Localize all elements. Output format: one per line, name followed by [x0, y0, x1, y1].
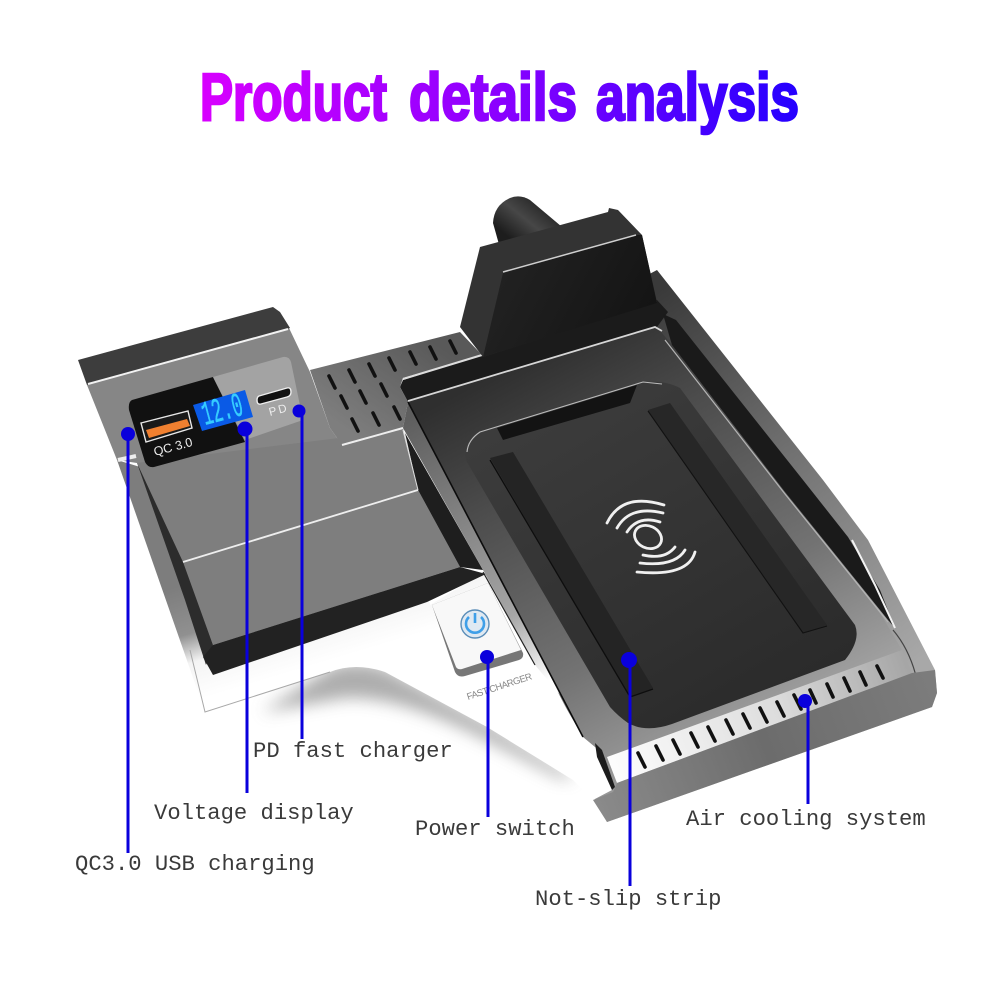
callout: Power switch — [415, 650, 575, 842]
front edge — [593, 670, 937, 822]
rear channel under the tower — [400, 300, 668, 402]
left tray front lip — [203, 567, 486, 675]
charging pad — [465, 382, 857, 728]
left module dark top edge — [78, 307, 290, 385]
black tower — [460, 208, 657, 357]
callout: Not-slip strip: Not-slip strip — [535, 887, 721, 912]
main tray floor — [408, 327, 902, 757]
left corner clip — [595, 743, 615, 790]
callout: Not-slip strip — [535, 652, 721, 912]
callout: Power switch: Power switch — [415, 817, 575, 842]
callout: Voltage display: Voltage display — [154, 801, 354, 826]
port panel: 12.0 — [198, 388, 247, 436]
power button panel — [432, 583, 523, 676]
power icon — [461, 610, 489, 638]
callout: Air cooling system — [686, 694, 926, 832]
callout: PD fast charger — [253, 404, 453, 764]
port panel — [129, 357, 303, 467]
title: details — [409, 60, 577, 135]
black USB panel — [129, 377, 245, 467]
grey PD panel — [213, 357, 303, 440]
left tray right wall — [405, 433, 483, 570]
left wing: silver to white — [117, 460, 612, 800]
callout: Air cooling system: Air cooling system — [686, 807, 926, 832]
car plug connector — [493, 196, 568, 250]
non-slip strip: left — [490, 452, 653, 697]
wireless charging icon — [607, 501, 695, 573]
shadow below the wing — [262, 663, 575, 778]
vent panel between modules — [310, 332, 482, 445]
outer body rim — [408, 270, 937, 822]
title — [200, 60, 799, 135]
top notch — [497, 385, 637, 440]
left tray floor — [137, 430, 460, 645]
QC label: QC 3.0 — [152, 435, 194, 459]
tray top lip highlight — [408, 327, 662, 401]
vent slots — [638, 666, 883, 767]
callout: PD fast charger: PD fast charger — [253, 739, 453, 764]
FAST CHARGER text: FAST CHARGER — [466, 671, 534, 703]
vent slots — [329, 341, 456, 431]
voltage display — [193, 390, 253, 431]
non-slip strip: right — [648, 403, 827, 633]
air vent strip — [607, 650, 912, 783]
product: wireless charger console — [78, 196, 937, 822]
callout: Voltage display — [154, 422, 354, 826]
callout: QC3.0 USB charging — [75, 427, 315, 877]
title: Product — [200, 60, 387, 135]
callout: QC3.0 USB charging: QC3.0 USB charging — [75, 852, 315, 877]
USB port — [141, 411, 192, 442]
USB-C port — [257, 388, 291, 404]
left module silver face — [87, 328, 418, 562]
left tray side wall — [137, 463, 213, 665]
title: analysis — [596, 60, 799, 135]
PD label: PD — [268, 402, 290, 419]
side groove — [663, 314, 895, 628]
tray crease line — [183, 490, 418, 562]
silver band beside main tray — [403, 402, 562, 697]
